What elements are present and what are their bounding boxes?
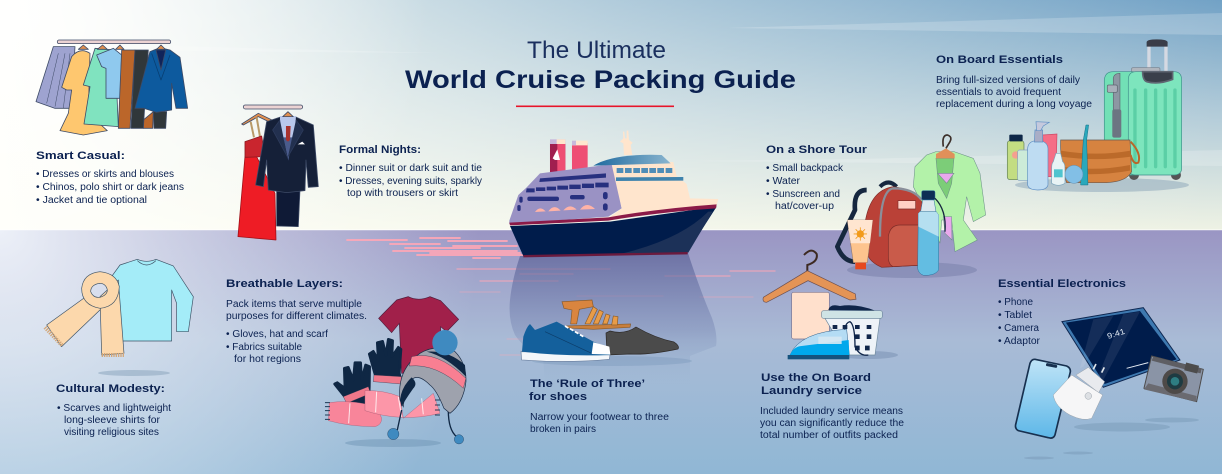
- heading: The ‘Rule of Three’: [530, 378, 645, 390]
- illustration: hanger, basket and iron: [763, 251, 882, 359]
- sunscreen: [847, 220, 873, 269]
- blue deck windows: [617, 168, 672, 173]
- panel: laundry: [760, 251, 904, 441]
- camera: [1144, 356, 1203, 402]
- heading: [761, 372, 871, 397]
- heading: Use the On Board: [761, 372, 871, 384]
- hat pompom: [432, 330, 458, 355]
- body text: [530, 412, 669, 435]
- list: hat/cover-up: [775, 201, 834, 212]
- heading: [529, 378, 645, 403]
- list: • Scarves and lightweight: [57, 403, 171, 414]
- body text: replacement during a long voyage: [936, 99, 1092, 110]
- dropper bottle: [1052, 153, 1065, 185]
- water bottle: [918, 191, 945, 275]
- shadow: [838, 351, 898, 359]
- list: • Dresses or skirts and blouses: [36, 169, 174, 180]
- sandal: [562, 300, 631, 329]
- list: [57, 403, 171, 438]
- list: • Fabrics suitable: [226, 342, 302, 353]
- t-shirt: [379, 297, 459, 373]
- body text: total number of outfits packed: [760, 430, 898, 441]
- title: World Cruise Packing Guide: [405, 66, 796, 94]
- ship reflection: [510, 253, 716, 385]
- body text: you can significantly reduce the: [760, 418, 904, 429]
- tablet: [1062, 308, 1180, 387]
- shadows: [1024, 418, 1199, 460]
- panel: smart casual: [36, 40, 188, 206]
- items shadow: [1015, 178, 1189, 192]
- illustration: cruise ship: [509, 131, 718, 257]
- intro text: Pack items that serve multiple: [226, 299, 362, 310]
- list: [998, 297, 1041, 347]
- sun reflections on water: [347, 238, 775, 355]
- intro text: [226, 299, 367, 322]
- list: • Camera: [998, 323, 1040, 334]
- body text: Narrow your footwear to three: [530, 412, 669, 423]
- superstructure: [509, 164, 622, 224]
- body text: Bring full-sized versions of daily: [936, 75, 1080, 86]
- list: • Jacket and tie optional: [36, 195, 147, 206]
- illustration: t-shirt, gloves, hat, scarf: [325, 297, 466, 444]
- panel: cultural modesty: [45, 259, 193, 438]
- body text: essentials to avoid frequent: [936, 87, 1061, 98]
- hat tassels: [388, 428, 399, 440]
- list: visiting religious sites: [64, 427, 159, 438]
- lotion bottle: [1007, 135, 1024, 180]
- panel: breathable layers: [226, 278, 466, 447]
- items shadow: [847, 262, 977, 278]
- pump bottle: [1028, 122, 1049, 190]
- list: • Sunscreen and: [766, 189, 840, 200]
- list: • Phone: [998, 297, 1033, 308]
- portholes: [535, 205, 595, 212]
- toothbrush: [1081, 125, 1089, 185]
- list: • Tablet: [998, 310, 1032, 321]
- sea background: [0, 230, 1222, 474]
- list: for hot regions: [234, 354, 301, 365]
- dome: [593, 155, 671, 166]
- scarf: [328, 402, 382, 427]
- list: • Gloves, hat and scarf: [226, 329, 328, 340]
- title: The Ultimate: [527, 37, 666, 64]
- list: top with trousers or skirt: [347, 188, 458, 199]
- hull stripes: [509, 204, 717, 225]
- gloves: [335, 339, 401, 403]
- body text: broken in pairs: [530, 424, 596, 435]
- heading: Essential Electronics: [998, 278, 1126, 290]
- heading: Breathable Layers:: [226, 278, 343, 290]
- panel: essential electronics: [998, 278, 1203, 460]
- blue sponge: [1065, 165, 1083, 183]
- illustration: sweater and scarf: [45, 259, 193, 355]
- list: • Small backpack: [766, 163, 843, 174]
- list: [36, 169, 184, 206]
- heading: Laundry service: [761, 385, 862, 397]
- adaptor: [1053, 364, 1105, 419]
- intro text: purposes for different climates.: [226, 311, 367, 322]
- pink tube: [1043, 134, 1057, 177]
- illustration: devices: [1015, 308, 1203, 438]
- illustration: formal wear: [238, 105, 318, 240]
- backpack: [837, 182, 925, 267]
- panel: shoes: [521, 300, 692, 435]
- heading: On Board Essentials: [936, 54, 1063, 66]
- illustration: backpack, robe, bottle, sunscreen: [837, 135, 986, 275]
- hull: [510, 207, 717, 256]
- heading: Cultural Modesty:: [56, 383, 165, 395]
- body text: Included laundry service means: [760, 406, 903, 417]
- suitcase: [1104, 39, 1182, 180]
- wash bag: [1061, 140, 1132, 183]
- tablet: 9:41: [1106, 327, 1127, 341]
- small bottle: [1018, 150, 1029, 181]
- illustration: clothes rack: [36, 40, 188, 135]
- list: • Water: [766, 176, 801, 187]
- body text: [936, 75, 1092, 110]
- shadow: [345, 439, 441, 447]
- shoe shadow: [532, 356, 692, 366]
- title: [405, 37, 796, 94]
- sneaker: [521, 322, 610, 361]
- list: [766, 163, 843, 212]
- list: • Dinner suit or dark suit and tie: [339, 163, 482, 174]
- panel: formal nights: [238, 105, 482, 240]
- heading: Formal Nights:: [339, 144, 421, 156]
- list: [339, 163, 482, 199]
- phone: [1015, 359, 1070, 438]
- hat: [397, 410, 457, 437]
- list: [226, 329, 328, 365]
- illustration: suitcase and toiletries: [1007, 39, 1182, 190]
- heading: for shoes: [529, 391, 587, 403]
- panel: on board essentials: [936, 39, 1189, 192]
- ship funnels: [550, 139, 588, 173]
- list: • Adaptor: [998, 336, 1041, 347]
- oxford shoe: [606, 327, 678, 355]
- panel: on a shore tour: [766, 135, 986, 278]
- heading: On a Shore Tour: [766, 144, 868, 156]
- windows: [517, 173, 609, 211]
- heading: Smart Casual:: [36, 150, 125, 162]
- cream decks: [608, 162, 718, 218]
- title underline: [516, 106, 674, 107]
- body text: [760, 406, 904, 441]
- hanger: [936, 135, 955, 158]
- list: long-sleeve shirts for: [64, 415, 161, 426]
- ship mast: [620, 131, 633, 155]
- shadow: [98, 370, 170, 376]
- list: • Dresses, evening suits, sparkly: [339, 176, 482, 187]
- list: • Chinos, polo shirt or dark jeans: [36, 182, 184, 193]
- sky background: [0, 0, 1222, 230]
- robe: [913, 152, 986, 252]
